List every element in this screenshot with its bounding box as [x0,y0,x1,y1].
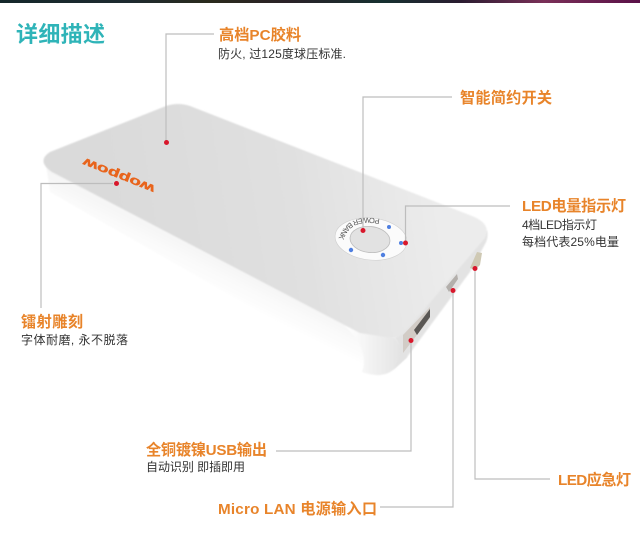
callout: smart switch [360,89,552,233]
device front face [46,164,407,376]
description: 自动识别 即插即用 [146,460,245,474]
logo: woppow: woppow [80,155,158,196]
power bank device [43,104,488,375]
heading: Micro LAN 电源输入口 [218,500,377,518]
power button ring: POWER BANK [338,218,380,240]
description: 字体耐磨, 永不脱落 [21,332,128,347]
device top face [43,104,487,338]
callout: emergency LED [472,266,631,489]
callout: Micro LAN input [218,288,456,518]
device side face [393,230,488,370]
heading: 高档PC胶料 [219,26,301,44]
title: 详细描述 [16,22,105,47]
power button ring [335,218,407,260]
decorative top strip [0,0,640,3]
description: 4档LED指示灯 [522,217,597,232]
callout: USB output [146,338,414,474]
description: 防火, 过125度球压标准. [218,46,346,61]
heading: 镭射雕刻 [21,313,83,331]
device corner shading [345,326,407,375]
callout: LED indicator: 每档代表25%电量 [522,234,619,249]
heading: LED电量指示灯 [522,197,626,215]
heading: LED应急灯 [558,471,631,489]
callout: laser engraving [21,181,128,347]
heading: 全铜镀镍USB输出 [146,441,267,459]
USB port [403,307,430,353]
heading: 智能简约开关 [460,89,552,107]
ring text [337,218,380,244]
LED indicators [349,225,403,257]
callout: LED indicator [403,197,626,249]
emergency LED window [470,252,482,270]
callout: PC material [164,26,346,145]
micro port [446,274,458,292]
